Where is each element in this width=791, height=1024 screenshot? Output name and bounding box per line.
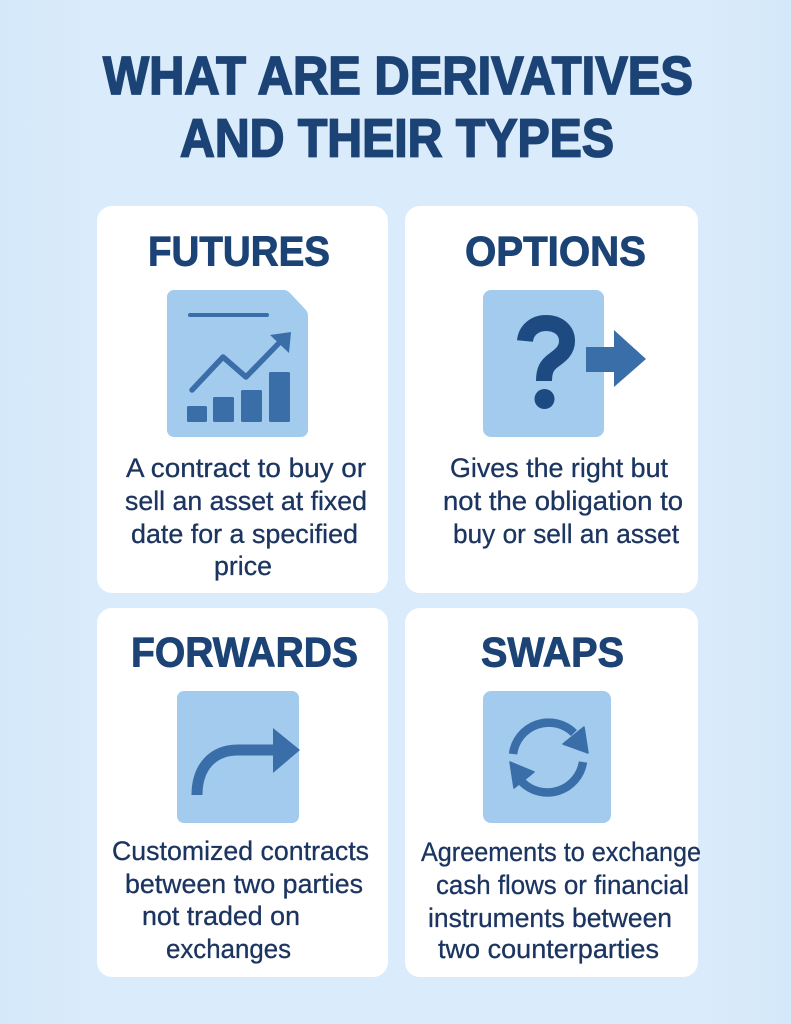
- panel: swaps: [405, 608, 701, 977]
- title: AND THEIR TYPES: [180, 108, 614, 168]
- description: swaps: instruments between: [428, 903, 672, 933]
- description: options: [443, 453, 683, 549]
- description: futures: price: [214, 551, 272, 581]
- description: forwards: not traded on: [142, 901, 300, 931]
- panel: options: [405, 206, 698, 593]
- icon: document with rising chart: [167, 290, 308, 437]
- description: options: not the obligation to: [443, 486, 683, 516]
- description: swaps: two counterparties: [438, 934, 659, 964]
- heading: options: OPTIONS: [465, 228, 646, 274]
- description: swaps: [421, 837, 701, 964]
- description: forwards: Customized contracts: [112, 836, 369, 866]
- title: WHAT ARE DERIVATIVES: [103, 46, 693, 106]
- description: forwards: between two parties: [125, 869, 363, 899]
- description: options: buy or sell an asset: [453, 519, 679, 549]
- description: swaps: Agreements to exchange: [421, 837, 701, 867]
- heading: futures: FUTURES: [148, 228, 330, 274]
- description: futures: [125, 453, 367, 581]
- description: options: Gives the right but: [450, 453, 668, 483]
- title: [103, 46, 693, 168]
- description: forwards: [112, 836, 369, 964]
- description: futures: A contract to buy or: [126, 453, 366, 483]
- description: futures: date for a specified: [131, 519, 358, 549]
- description: swaps: cash flows or financial: [436, 870, 689, 900]
- icon: circular swap arrows: [483, 691, 611, 823]
- icon: curved forward arrow: [177, 691, 300, 823]
- description: forwards: exchanges: [166, 934, 291, 964]
- panel: forwards: [97, 608, 388, 977]
- description: futures: sell an asset at fixed: [125, 486, 367, 516]
- panel: futures: [97, 206, 388, 593]
- icon: question mark with arrow: [483, 290, 646, 437]
- heading: swaps: SWAPS: [481, 628, 624, 676]
- heading: forwards: FORWARDS: [131, 628, 358, 676]
